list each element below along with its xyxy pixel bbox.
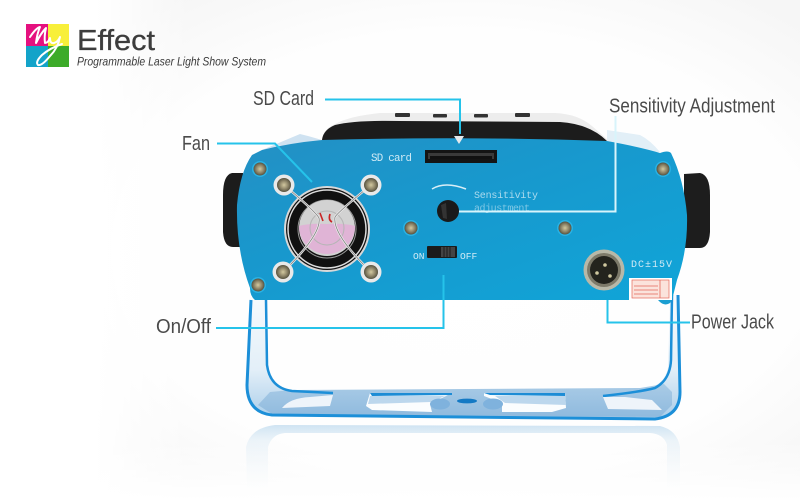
sensitivity panel text <box>474 190 538 215</box>
leader line: on/off <box>216 275 444 328</box>
warning label <box>629 278 672 300</box>
stand end notch right <box>603 397 662 410</box>
SD card slot <box>425 150 497 163</box>
panel screws <box>250 161 671 293</box>
label: On/Off: On/Off <box>156 316 211 338</box>
on/off switch <box>413 246 478 262</box>
logo icon <box>26 24 69 67</box>
folding stand <box>247 295 680 419</box>
leader line: sensitivity <box>459 116 616 212</box>
title: Effect <box>77 25 155 57</box>
stand base plate <box>258 384 672 417</box>
fan <box>272 174 382 282</box>
leader line: fan <box>217 144 312 182</box>
sensitivity knob <box>432 185 466 222</box>
title: Programmable Laser Light Show System <box>77 54 266 68</box>
stand arm faces <box>247 295 680 419</box>
reflection on floor <box>246 425 680 490</box>
leader line: power jack <box>608 300 690 322</box>
label: SD Card: SD Card <box>253 88 314 110</box>
label: Sensitivity Adjustment: Sensitivity Adjustment <box>609 96 775 118</box>
on/off switch: OFF <box>460 251 478 262</box>
back panel <box>237 138 687 304</box>
left knob <box>223 173 243 247</box>
right knob <box>684 173 710 248</box>
leader line and arrow: SD card <box>325 100 464 144</box>
on/off switch: ON <box>413 251 425 262</box>
stand end notch left <box>282 395 333 408</box>
laser unit top housing <box>262 113 660 156</box>
stand inner edge <box>266 295 672 396</box>
label: Power Jack: Power Jack <box>691 312 775 334</box>
DC voltage text: DC±15V <box>631 260 672 271</box>
SD card panel text: SD card <box>371 153 412 165</box>
title <box>77 25 266 68</box>
sensitivity panel text: adjustment <box>474 203 530 215</box>
label: Fan: Fan <box>182 133 210 155</box>
power jack <box>584 250 624 290</box>
sensitivity panel text: Sensitivity <box>474 190 538 202</box>
stand outer edge <box>247 295 680 419</box>
stand cut-outs <box>366 393 452 412</box>
